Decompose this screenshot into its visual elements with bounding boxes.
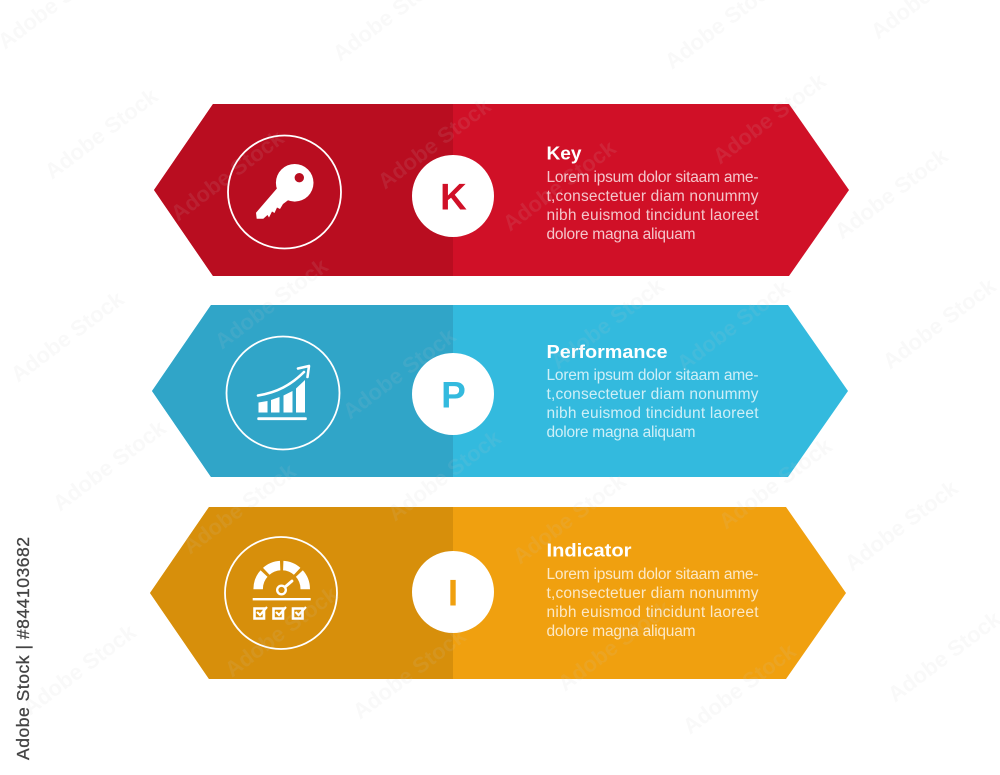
letter badge P: P bbox=[441, 374, 466, 416]
watermark pattern: Adobe Stock bbox=[383, 425, 506, 526]
text block: Indicator: nibh euismod tincidunt laoreet bbox=[546, 604, 759, 621]
panel: Key bbox=[154, 104, 849, 276]
key panel dark left section bbox=[154, 104, 453, 276]
text block: Key: Key bbox=[546, 144, 582, 164]
text block: Performance: nibh euismod tincidunt laoreet bbox=[546, 405, 759, 422]
text block: Key: Lorem ipsum dolor sitaam ame- bbox=[546, 169, 758, 186]
watermark pattern: Adobe Stock bbox=[220, 581, 343, 682]
watermark pattern: Adobe Stock bbox=[338, 323, 461, 424]
letter badge K: K bbox=[440, 176, 467, 218]
text block: Indicator: Lorem ipsum dolor sitaam ame- bbox=[546, 566, 758, 583]
watermark pattern: Adobe Stock bbox=[6, 286, 129, 387]
letter badge I bbox=[412, 551, 494, 633]
watermark pattern: Adobe Stock bbox=[714, 433, 837, 534]
watermark pattern: Adobe Stock bbox=[830, 143, 953, 244]
text block: Performance: Lorem ipsum dolor sitaam ame- bbox=[546, 367, 758, 384]
watermark pattern: Adobe Stock bbox=[18, 619, 141, 720]
text block: Key: nibh euismod tincidunt laoreet bbox=[546, 207, 759, 224]
text block: Indicator: t,consectetuer diam nonummy bbox=[546, 585, 759, 602]
panel: Indicator bbox=[150, 507, 846, 679]
performance panel light hexagon bbox=[152, 305, 848, 477]
watermark pattern: Adobe Stock bbox=[40, 83, 163, 184]
icon: key bbox=[228, 136, 341, 248]
indicator panel dark left section bbox=[150, 507, 453, 679]
text block: Performance: t,consectetuer diam nonummy bbox=[546, 386, 759, 403]
watermark pattern: Adobe Stock bbox=[508, 468, 631, 569]
watermark pattern: Adobe Stock bbox=[672, 275, 795, 376]
text block: Performance: Performance bbox=[546, 342, 668, 362]
key panel light hexagon bbox=[154, 104, 849, 276]
text block: Performance bbox=[546, 342, 759, 441]
text block: Key bbox=[546, 144, 759, 243]
letter badge K bbox=[412, 155, 494, 237]
performance panel dark left section bbox=[152, 305, 453, 477]
text block: Key: t,consectetuer diam nonummy bbox=[546, 188, 759, 205]
text block: Performance: dolore magna aliquam bbox=[546, 424, 696, 441]
watermark pattern: Adobe Stock bbox=[708, 68, 831, 169]
watermark pattern: Adobe Stock bbox=[553, 595, 676, 696]
icon: gauge with checklist bbox=[225, 537, 337, 649]
watermark pattern: Adobe Stock bbox=[546, 273, 669, 374]
watermark pattern: Adobe Stock bbox=[878, 273, 1000, 374]
text block: Indicator: Indicator bbox=[546, 540, 632, 560]
watermark pattern: Adobe Stock bbox=[348, 623, 471, 724]
text block: Indicator: dolore magna aliquam bbox=[546, 623, 696, 640]
text block: Key: dolore magna aliquam bbox=[546, 226, 696, 243]
watermark pattern: Adobe Stock bbox=[210, 253, 333, 354]
watermark pattern: Adobe Stock bbox=[840, 475, 963, 576]
watermark pattern: Adobe Stock bbox=[498, 135, 621, 236]
icon: growth chart bbox=[226, 336, 340, 450]
watermark pattern: Adobe Stock bbox=[48, 415, 171, 516]
watermark pattern: Adobe Stock bbox=[373, 93, 496, 194]
text block: Indicator bbox=[546, 540, 759, 640]
watermark pattern: Adobe Stock bbox=[178, 458, 301, 559]
watermark pattern: Adobe Stock bbox=[166, 125, 289, 226]
indicator panel light hexagon bbox=[150, 507, 846, 679]
panel: Performance bbox=[152, 305, 848, 477]
stock image id caption: Adobe Stock | #844103682 bbox=[13, 537, 33, 760]
watermark pattern: Adobe Stock bbox=[678, 638, 801, 739]
letter badge P bbox=[412, 353, 494, 435]
letter badge I: I bbox=[448, 572, 458, 614]
